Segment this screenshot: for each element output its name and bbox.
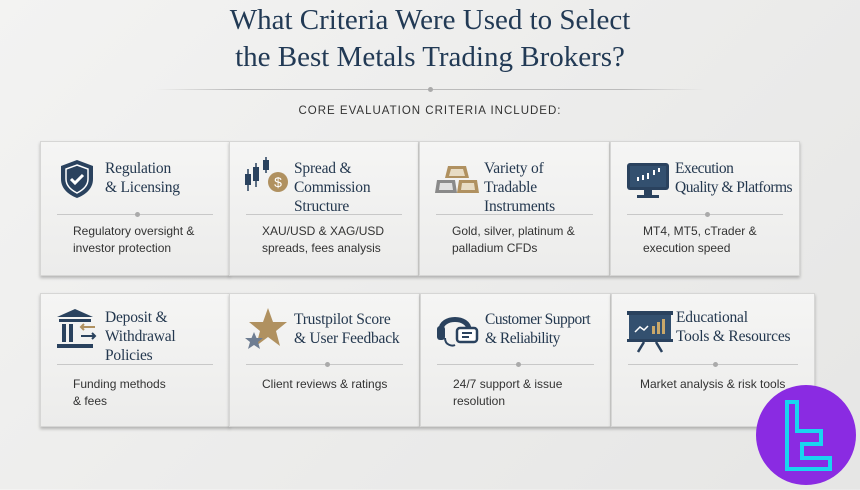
subtitle: CORE EVALUATION CRITERIA INCLUDED: — [298, 105, 561, 117]
icon: candles and coin: $ — [274, 174, 282, 190]
icon: candles and coin — [245, 157, 288, 192]
divider — [155, 89, 705, 90]
panel: regulation — [40, 141, 230, 276]
text — [452, 224, 575, 255]
text: Gold, silver, platinum & — [452, 224, 575, 238]
heading: Educational — [676, 309, 748, 326]
heading — [294, 311, 400, 347]
heading: Customer Support — [485, 311, 590, 328]
text: investor protection — [73, 241, 171, 255]
panel: educational — [611, 293, 815, 427]
text: 24/7 support & issue — [453, 377, 562, 391]
text: Regulatory oversight & — [73, 224, 194, 238]
title: What Criteria Were Used to Select — [230, 4, 630, 36]
logo badge — [756, 385, 856, 485]
heading: Commission — [294, 179, 370, 196]
panel: trustpilot — [229, 293, 420, 427]
heading — [484, 160, 555, 215]
icon: stars — [245, 308, 287, 349]
heading: Deposit & — [105, 309, 167, 326]
heading — [676, 309, 790, 345]
text: resolution — [453, 394, 505, 408]
icon: headset — [437, 317, 478, 347]
heading: Trustpilot Score — [294, 311, 391, 328]
heading: Structure — [294, 198, 349, 215]
text — [643, 224, 757, 255]
text: spreads, fees analysis — [262, 241, 381, 255]
text: Market analysis & risk tools — [640, 377, 785, 391]
text: Funding methods — [73, 377, 166, 391]
icon: shield — [61, 160, 93, 198]
heading — [105, 160, 180, 196]
title: the Best Metals Trading Brokers? — [235, 41, 625, 73]
panel: execution — [610, 141, 800, 276]
text: & fees — [73, 394, 107, 408]
heading — [105, 309, 176, 364]
text: execution speed — [643, 241, 730, 255]
text: MT4, MT5, cTrader & — [643, 224, 757, 238]
text — [262, 224, 384, 255]
text: Client reviews & ratings — [262, 377, 387, 391]
heading: Policies — [105, 347, 152, 364]
text — [453, 377, 562, 408]
heading: & Reliability — [485, 330, 560, 347]
panel: support — [420, 293, 611, 427]
heading — [294, 160, 370, 215]
heading: Tools & Resources — [676, 328, 790, 345]
text: palladium CFDs — [452, 241, 537, 255]
icon: metal bars — [435, 166, 479, 193]
heading: Instruments — [484, 198, 555, 215]
title — [230, 4, 630, 73]
text — [73, 377, 166, 408]
icon: presentation board — [627, 311, 673, 353]
panel: deposit — [40, 293, 230, 427]
icon: monitor — [627, 163, 669, 198]
panel: spread — [229, 141, 419, 276]
heading: Spread & — [294, 160, 351, 177]
heading: Tradable — [484, 179, 537, 196]
heading — [485, 311, 591, 347]
heading: Variety of — [484, 160, 544, 177]
heading — [675, 160, 792, 196]
heading: Execution — [675, 160, 733, 177]
text: XAU/USD & XAG/USD — [262, 224, 384, 238]
panel: instruments — [419, 141, 610, 276]
heading: Regulation — [105, 160, 171, 177]
heading: Quality & Platforms — [675, 179, 792, 196]
heading: Withdrawal — [105, 328, 176, 345]
icon: bank — [57, 309, 96, 348]
heading: & Licensing — [105, 179, 180, 196]
heading: & User Feedback — [294, 330, 399, 347]
text — [73, 224, 194, 255]
